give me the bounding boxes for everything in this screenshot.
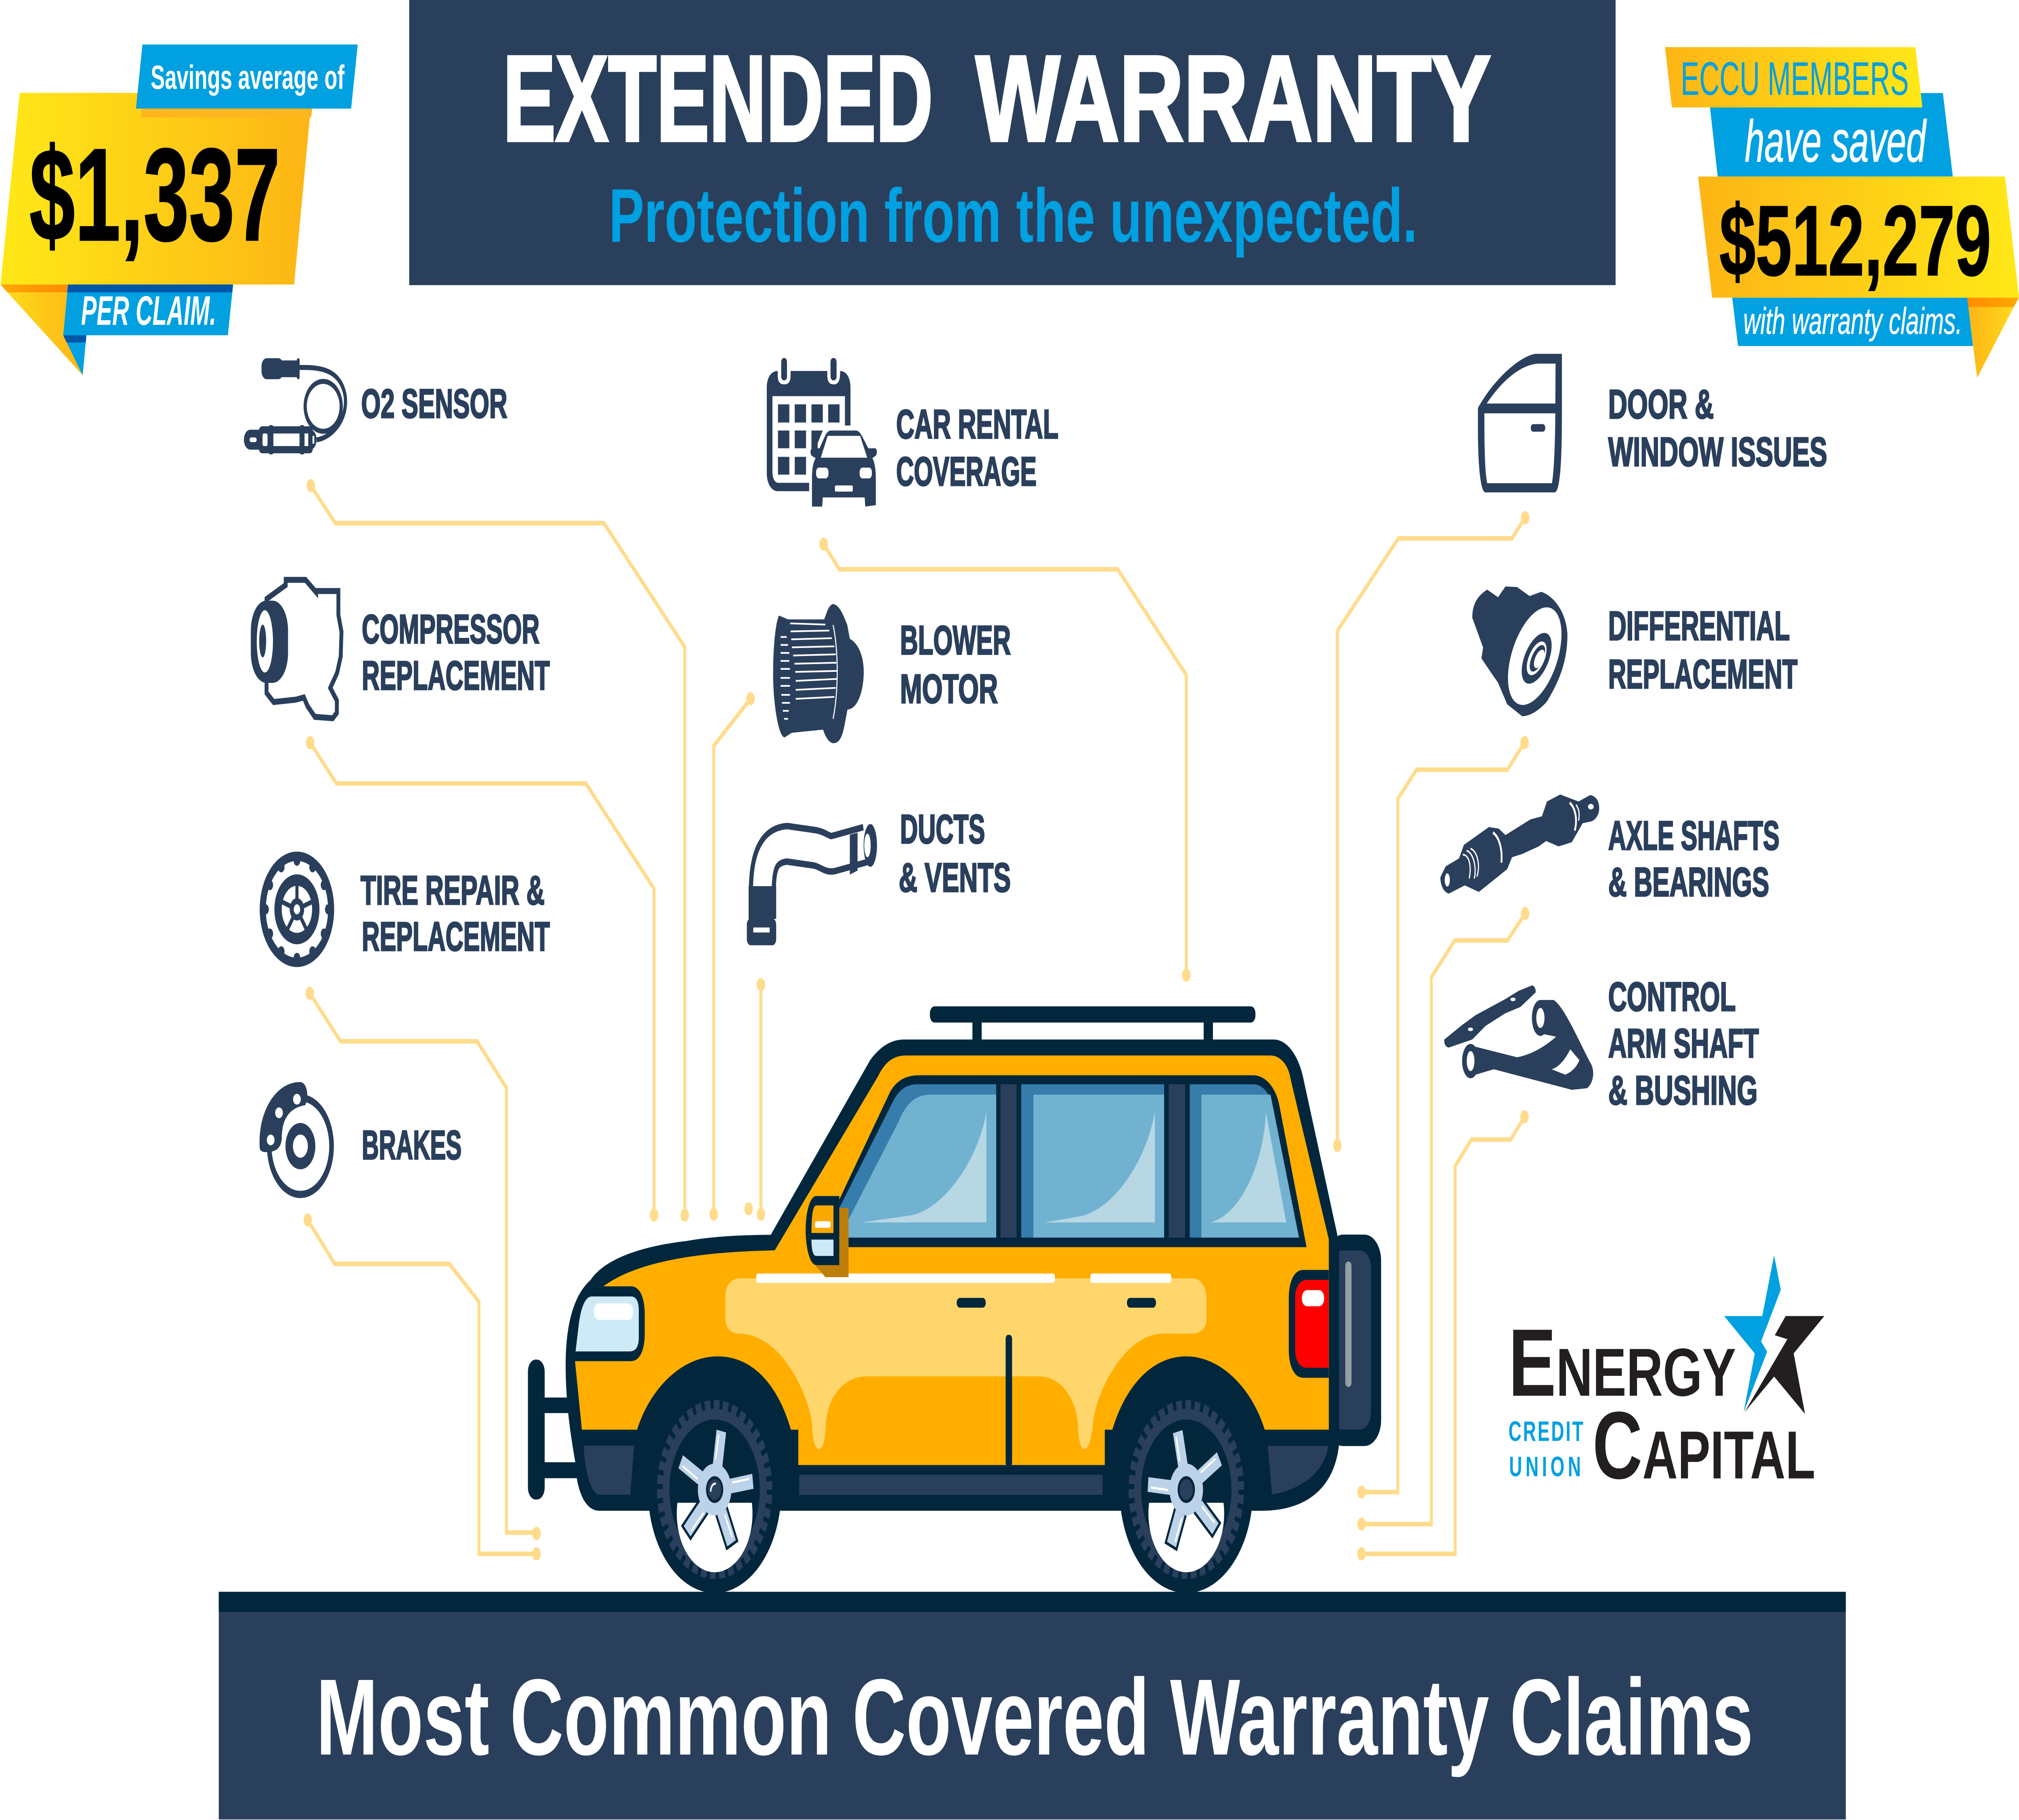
subtitle: Protection from the unexpected.	[609, 173, 1417, 258]
footer heading: Most Common Covered Warranty Claims	[316, 1656, 1753, 1778]
icon: control arm	[1444, 985, 1593, 1090]
icon: brakes	[260, 1082, 332, 1195]
headlight	[574, 1286, 645, 1361]
logo wordmark energy: E NERGY	[1509, 1309, 1736, 1416]
tailgate	[1326, 1235, 1381, 1446]
body panel highlight	[726, 1278, 1207, 1449]
connector: blower motor	[709, 692, 755, 1221]
icon: blower motor	[773, 604, 864, 743]
connector: brakes	[304, 1214, 541, 1560]
label: compressor replacement: REPLACEMENT	[362, 653, 550, 698]
text: savings average of: Savings average of	[151, 58, 344, 96]
label: door and window issues: WINDOW ISSUES	[1608, 430, 1827, 475]
body trim strips	[756, 1273, 1171, 1467]
icon: axle shaft	[1440, 795, 1599, 893]
icon: rental car	[810, 430, 877, 507]
connector: axle	[1357, 907, 1529, 1531]
bull bar	[528, 1360, 579, 1499]
text: ECCU members: ECCU MEMBERS	[1681, 52, 1909, 105]
label: car rental coverage	[896, 402, 1058, 495]
label: O2 sensor: O2 SENSOR	[361, 381, 507, 427]
icon: tire	[260, 851, 334, 967]
body outline	[566, 1040, 1339, 1511]
mirror	[806, 1196, 848, 1277]
wheel arches	[631, 1357, 1271, 1503]
label: ducts and vents: DUCTS	[900, 807, 985, 852]
label: door and window issues	[1608, 382, 1827, 475]
connector: ducts	[744, 978, 765, 1221]
windows	[839, 1075, 1307, 1247]
label: blower motor	[900, 618, 1011, 712]
label: control arm shaft and bushing: & BUSHING	[1608, 1068, 1758, 1113]
connector: compressor	[306, 736, 658, 1222]
label: car rental coverage: CAR RENTAL	[896, 402, 1058, 447]
logo text credit: CREDIT	[1509, 1416, 1583, 1447]
title banner	[409, 0, 1616, 285]
front wheel	[648, 1386, 781, 1593]
label: tire repair and replacement: REPLACEMENT	[362, 914, 550, 960]
badge: ECCU members saved	[1665, 47, 2019, 378]
title: extended warranty: WARRANTY	[976, 30, 1491, 166]
connector: door	[1333, 511, 1529, 1152]
amount: $512,279: $512,279	[1719, 185, 1991, 297]
tail light	[1289, 1270, 1329, 1378]
icon: compressor	[251, 580, 342, 718]
label: brakes: BRAKES	[362, 1123, 462, 1168]
logo: Energy Capital Credit Union	[1509, 1255, 1824, 1499]
connector: car rental	[819, 537, 1190, 982]
label: ducts and vents: & VENTS	[899, 855, 1011, 901]
logo text union: UNION	[1509, 1451, 1581, 1482]
icon: car rental calendar	[767, 358, 877, 507]
rear pillar	[1329, 1240, 1339, 1446]
illustration: yellow SUV	[528, 1006, 1381, 1593]
label: compressor replacement	[362, 607, 550, 698]
label: control arm shaft and bushing	[1608, 974, 1759, 1113]
connector: O2 sensor	[306, 479, 689, 1222]
label: differential replacement: REPLACEMENT	[1608, 652, 1798, 697]
label: blower motor: MOTOR	[900, 667, 998, 712]
logo star	[1724, 1255, 1824, 1414]
label: axle shafts and bearings: AXLE SHAFTS	[1608, 813, 1780, 859]
connector: tire	[305, 987, 541, 1540]
label: differential replacement: DIFFERENTIAL	[1608, 604, 1790, 649]
label: differential replacement	[1608, 604, 1798, 697]
label: compressor replacement: COMPRESSOR	[362, 607, 539, 652]
text: per claim: PER CLAIM.	[81, 288, 216, 334]
label: car rental coverage: COVERAGE	[896, 449, 1037, 495]
label: tire repair and replacement: TIRE REPAIR &	[361, 868, 545, 914]
roof rack	[930, 1006, 1255, 1044]
icon: differential	[1472, 587, 1572, 720]
label: axle shafts and bearings	[1608, 813, 1780, 905]
bumpers and rocker	[583, 1446, 1329, 1495]
icon: door	[1478, 354, 1562, 493]
body paint	[575, 1055, 1329, 1465]
connector: differential	[1357, 736, 1529, 1499]
connector: control arm	[1357, 1110, 1529, 1560]
label: tire repair and replacement	[361, 868, 550, 960]
badge: savings average per claim	[0, 44, 358, 375]
footer banner	[219, 1592, 1846, 1820]
label: blower motor: BLOWER	[900, 618, 1011, 663]
rear wheel	[1120, 1386, 1253, 1593]
icon: O2 sensor	[244, 358, 346, 455]
label: door and window issues: DOOR &	[1608, 382, 1714, 428]
title: extended warranty: EXTENDED	[503, 30, 933, 166]
amount: $1,337: $1,337	[29, 121, 280, 268]
title: extended warranty	[503, 30, 1491, 166]
label: ducts and vents	[899, 807, 1011, 901]
text: with warranty claims: with warranty claims.	[1743, 300, 1962, 342]
label: control arm shaft and bushing: ARM SHAFT	[1608, 1021, 1759, 1066]
icon: ducts hose	[747, 824, 877, 945]
logo wordmark capital: C APITAL	[1593, 1392, 1815, 1499]
label: axle shafts and bearings: & BEARINGS	[1608, 860, 1769, 905]
label: control arm shaft and bushing: CONTROL	[1608, 974, 1736, 1020]
text: have saved: have saved	[1745, 109, 1927, 174]
